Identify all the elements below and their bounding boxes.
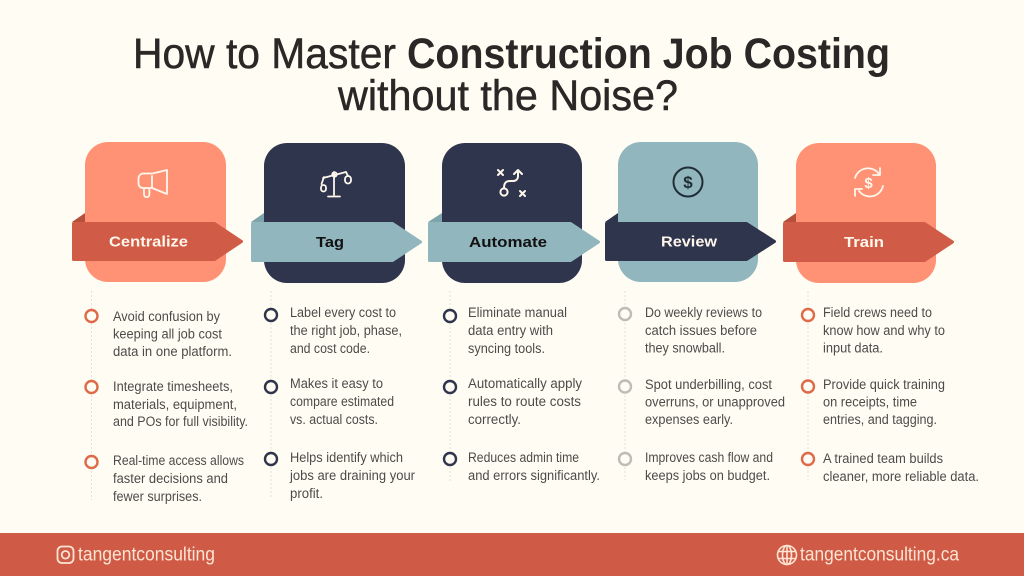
- text: point 1: syncing tools.: [468, 341, 545, 356]
- text: point 1: data in one platform.: [113, 344, 232, 359]
- text: point 1: input data.: [823, 340, 883, 356]
- bullet markers: [444, 310, 456, 465]
- text: point 3: faster decisions and: [113, 471, 228, 486]
- text: point 3: keeps jobs on budget.: [645, 468, 770, 483]
- panel: Tag: [251, 143, 420, 283]
- text: point 2: [468, 376, 582, 427]
- text: point 1: Field crews need to: [823, 305, 932, 320]
- bullet markers: [86, 310, 98, 468]
- banner fold: [251, 213, 264, 222]
- column: Tag points: [265, 305, 415, 501]
- banner fold: [428, 213, 442, 222]
- icon: dollar coin: [674, 168, 702, 196]
- text: point 3: [468, 450, 600, 483]
- banner: Tag: [252, 224, 420, 260]
- text: point 1: Label every cost to: [290, 305, 396, 320]
- text: social handle: tangentconsulting: [78, 544, 215, 566]
- text: point 1: know how and why to: [823, 323, 945, 338]
- text: point 1: [823, 305, 945, 356]
- text: point 3: [113, 453, 244, 504]
- title: How to Master: [133, 30, 396, 78]
- panel: Train: [783, 143, 952, 283]
- text: point 1: [113, 309, 232, 359]
- icon: strategy path: [498, 170, 525, 196]
- banner: Review: [606, 224, 774, 260]
- title: [133, 30, 890, 120]
- text: point 2: [823, 377, 945, 427]
- text: point 2: [645, 377, 785, 427]
- panel: Automate: [428, 143, 598, 283]
- icon: money cycle: $: [864, 175, 873, 192]
- banner fold: [72, 213, 85, 222]
- text: point 1: [290, 305, 402, 356]
- text: point 3: [823, 451, 979, 484]
- text: point 3: cleaner, more reliable data.: [823, 469, 979, 484]
- banner: Review: Review: [661, 234, 717, 250]
- banner: Train: [784, 224, 952, 260]
- footer bar: [0, 533, 1024, 576]
- text: point 1: Avoid confusion by: [113, 309, 220, 324]
- text: website: tangentconsulting.ca: [800, 544, 959, 566]
- text: point 2: [113, 379, 248, 429]
- text: point 2: entries, and tagging.: [823, 412, 937, 427]
- card: Train: [796, 143, 936, 283]
- banner fold: [783, 213, 796, 222]
- text: point 3: Reduces admin time: [468, 450, 579, 465]
- text: point 2: and POs for full visibility.: [113, 414, 248, 429]
- text: point 2: Automatically apply: [468, 376, 582, 391]
- text: point 1: the right job, phase,: [290, 323, 402, 338]
- banner: Automate: Automate: [469, 234, 547, 251]
- banner: Automate: [430, 224, 598, 260]
- card: Automate: [442, 143, 582, 283]
- text: point 2: rules to route costs: [468, 394, 581, 409]
- icon: instagram: [58, 546, 74, 563]
- title: without the Noise?: [337, 72, 678, 120]
- text: point 1: catch issues before: [645, 323, 757, 338]
- column: Review points: [619, 305, 785, 483]
- card: Tag: [264, 143, 405, 283]
- banner: Centralize: [74, 224, 242, 260]
- column: Automate points: [444, 305, 600, 483]
- text: point 1: [468, 305, 567, 356]
- title: Construction Job Costing: [407, 30, 890, 78]
- text: point 1: Eliminate manual: [468, 305, 567, 320]
- text: point 2: overruns, or unapproved: [645, 394, 785, 410]
- icon: balance scale: [321, 172, 351, 196]
- text: point 1: [645, 305, 762, 356]
- icon: dollar coin: $: [683, 173, 693, 192]
- banner: Train: Train: [844, 234, 884, 251]
- banner: Tag: Tag: [316, 234, 344, 251]
- icon: money cycle: [855, 168, 883, 196]
- text: point 1: they snowball.: [645, 340, 725, 356]
- text: point 2: on receipts, time: [823, 394, 917, 410]
- text: point 2: Makes it easy to: [290, 376, 383, 391]
- column: Train points: [802, 305, 979, 484]
- text: point 3: [289, 450, 415, 501]
- icon: globe: [778, 546, 796, 564]
- text: point 3: Improves cash flow and: [645, 450, 773, 465]
- text: point 2: expenses early.: [645, 412, 733, 427]
- text: point 2: vs. actual costs.: [290, 412, 378, 427]
- text: point 3: jobs are draining your: [289, 468, 415, 483]
- text: point 3: Helps identify which: [290, 450, 403, 465]
- card: Centralize: [85, 142, 226, 282]
- column: Centralize points: [86, 309, 248, 504]
- text: point 2: materials, equipment,: [113, 397, 237, 412]
- bullet markers: [265, 309, 277, 465]
- text: point 3: Real-time access allows: [113, 453, 244, 468]
- text: point 2: Integrate timesheets,: [113, 379, 233, 394]
- text: point 2: correctly.: [468, 412, 521, 427]
- text: point 3: [645, 450, 773, 483]
- icon: megaphone: [138, 170, 167, 197]
- text: point 3: fewer surprises.: [113, 489, 202, 504]
- bullet markers: [802, 309, 814, 465]
- panel: Centralize: [72, 142, 242, 282]
- banner fold: [605, 213, 618, 222]
- text: point 1: and cost code.: [290, 341, 370, 356]
- text: point 1: data entry with: [468, 323, 553, 338]
- text: point 1: Do weekly reviews to: [645, 305, 762, 320]
- text: point 2: Provide quick training: [823, 377, 945, 392]
- text: point 3: profit.: [290, 486, 323, 501]
- text: point 2: Spot underbilling, cost: [645, 377, 772, 392]
- panel: Review: [605, 142, 774, 282]
- text: point 2: compare estimated: [290, 394, 394, 409]
- card: Review: [618, 142, 758, 282]
- text: point 2: [290, 376, 394, 427]
- text: point 3: A trained team builds: [823, 451, 943, 466]
- bullet markers: [619, 308, 631, 465]
- text: point 3: and errors significantly.: [468, 468, 600, 483]
- text: point 1: keeping all job cost: [113, 326, 222, 342]
- banner: Centralize: Centralize: [109, 234, 188, 250]
